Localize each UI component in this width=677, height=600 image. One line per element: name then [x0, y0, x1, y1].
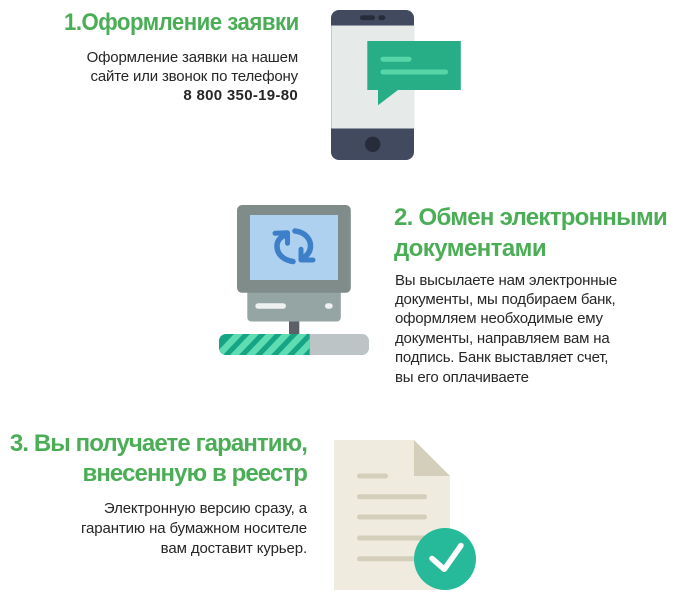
heading: step 2: 2. Обмен электронными	[394, 204, 667, 231]
text: step 3 description	[81, 500, 308, 557]
text: step 1 description: 8 800 350-19-80	[183, 87, 298, 104]
text: step 2 description: документы, направляем вам на	[395, 330, 610, 347]
text: step 2 description	[395, 272, 617, 386]
heading: step 3	[10, 430, 307, 487]
icon: document with check mark	[334, 440, 476, 590]
heading: step 1: 1.Оформление заявки	[64, 9, 299, 36]
text: step 3 description: гарантию на бумажном носителе	[81, 520, 307, 537]
icon: phone with message	[331, 10, 461, 160]
text: step 2 description: Вы высылаете нам электронные	[395, 272, 617, 288]
text: step 3 description: вам доставит курьер.	[161, 540, 307, 557]
text: step 2 description: подпись. Банк выставляет счет,	[395, 349, 608, 366]
text: step 2 description: документы, мы подбираем банк,	[395, 291, 616, 308]
heading: step 3: 3. Вы получаете гарантию,	[10, 430, 307, 457]
text: step 3 description: Электронную версию сразу, а	[104, 500, 307, 517]
text: step 1 description	[87, 49, 298, 104]
text: step 2 description: вы его оплачиваете	[395, 369, 529, 386]
heading: step 2: документами	[394, 235, 546, 262]
text: step 2 description: оформляем необходимые ему	[395, 310, 603, 327]
text: step 1 description: Оформление заявки на нашем	[87, 49, 298, 66]
heading: step 2	[394, 204, 667, 262]
icon: computer with progress bar	[219, 205, 369, 355]
text: step 1 description: сайте или звонок по телефону	[91, 68, 298, 85]
heading: step 3: внесенную в реестр	[82, 460, 307, 487]
